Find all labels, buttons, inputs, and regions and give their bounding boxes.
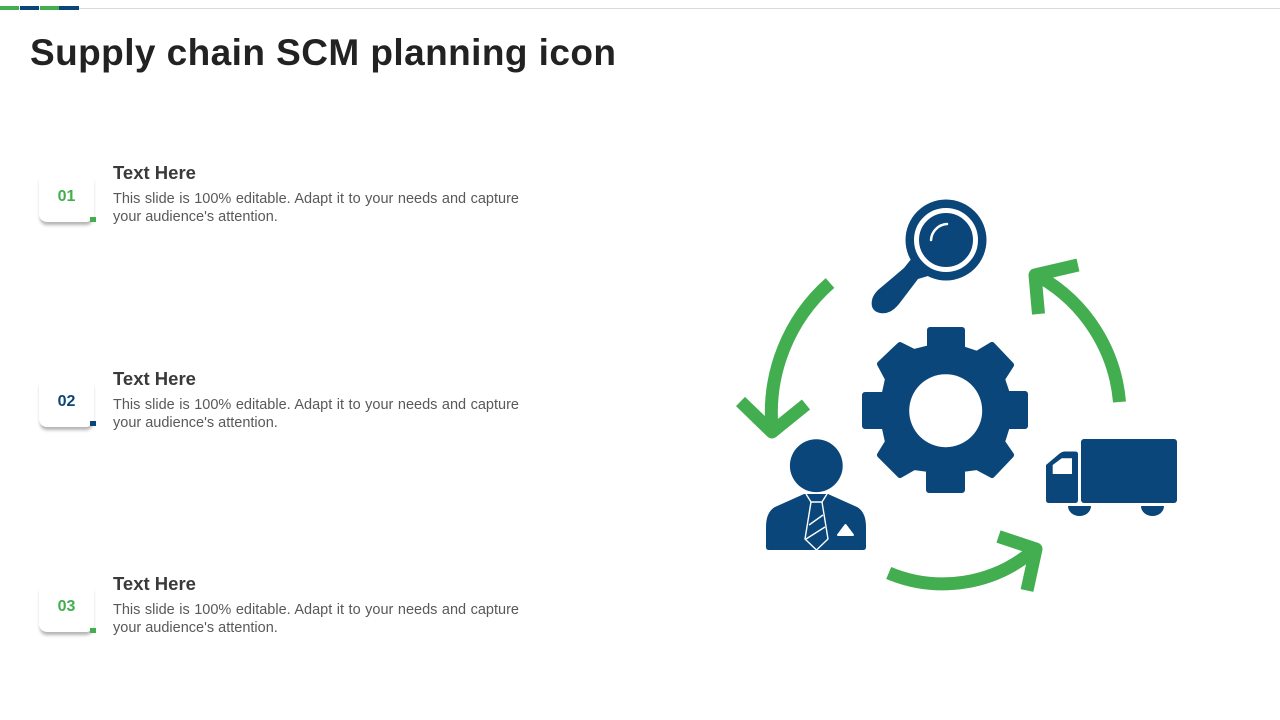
description 03: This slide is 100% editable. Adapt it to your needs and capture (113, 602, 519, 618)
accent dot 03 (90, 628, 96, 633)
icon: businessman (766, 439, 866, 550)
icon: magnifying glass (872, 200, 986, 313)
item 02 (38, 368, 519, 432)
arrow: magnifier to person (740, 283, 830, 432)
description 02: This slide is 100% editable. Adapt it to your needs and capture (113, 397, 519, 413)
item 01 (38, 162, 519, 227)
description 01: your audience's attention. (113, 209, 278, 225)
heading 01: Text Here (113, 162, 196, 183)
heading 02: Text Here (113, 368, 196, 389)
description 03 (113, 602, 519, 636)
accent dot 02 (90, 421, 96, 426)
description 02 (113, 397, 519, 431)
arrow: truck to magnifier (1035, 265, 1120, 402)
arrow: person to truck (889, 536, 1036, 590)
description 02: your audience's attention. (113, 415, 278, 431)
number badge 01 (39, 172, 94, 222)
icon: gear (865, 330, 1025, 490)
number badge 03 (39, 582, 94, 632)
heading 03: Text Here (113, 573, 196, 594)
number badge 03: 03 (58, 598, 75, 615)
icon: delivery truck (1046, 439, 1177, 516)
item 03 (38, 573, 519, 637)
title: Supply chain SCM planning icon (30, 32, 616, 73)
top accent bar (0, 6, 1280, 10)
description 01: This slide is 100% editable. Adapt it to your needs and capture (113, 191, 519, 207)
accent dot 01 (90, 217, 96, 222)
description 01 (113, 191, 519, 225)
number badge 02: 02 (58, 393, 75, 410)
number badge 02 (39, 377, 94, 427)
description 03: your audience's attention. (113, 620, 278, 636)
number badge 01: 01 (58, 188, 75, 205)
